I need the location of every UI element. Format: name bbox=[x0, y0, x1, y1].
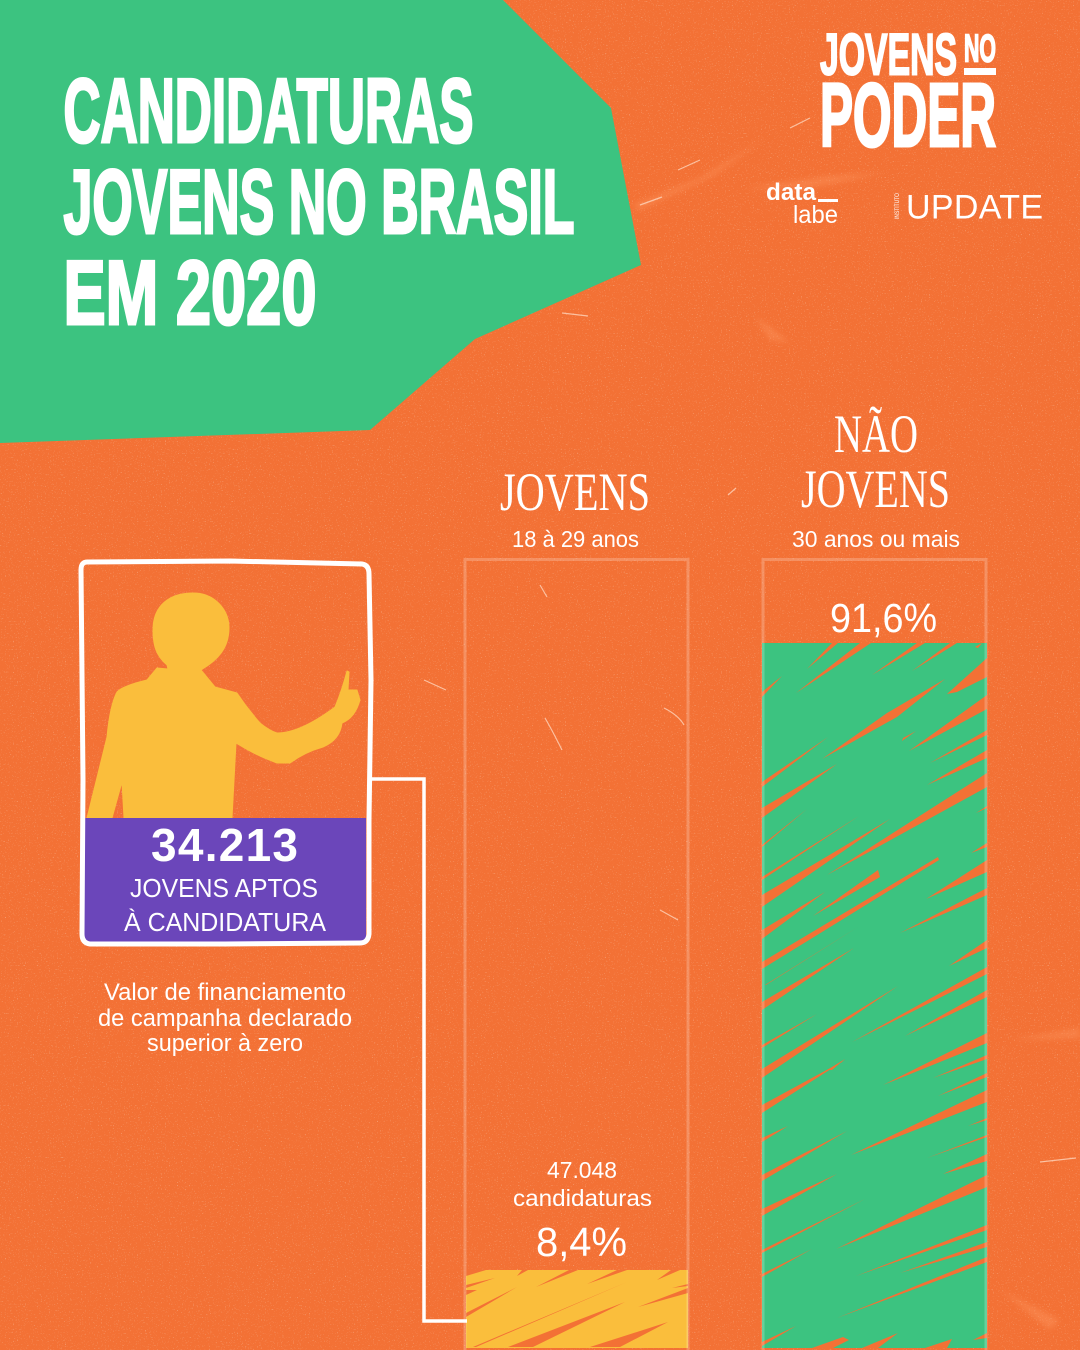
column heading: não jovens bbox=[792, 404, 960, 552]
note: campaign financing: Valor de financiamento bbox=[104, 979, 346, 1006]
caption bbox=[124, 873, 327, 937]
panel: jovens aptos card bbox=[81, 561, 371, 944]
caption: À CANDIDATURA bbox=[124, 907, 327, 937]
title: CANDIDATURAS bbox=[64, 61, 474, 162]
hand-drawn frame bbox=[81, 561, 371, 944]
connector line bbox=[371, 779, 467, 1321]
logo: data labe bbox=[766, 179, 838, 229]
logo: Jovens no Poder: JOVENS bbox=[820, 22, 957, 88]
note: campaign financing: superior à zero bbox=[147, 1030, 303, 1057]
column heading: jovens: 18 à 29 anos bbox=[512, 526, 639, 552]
column heading: jovens bbox=[500, 462, 650, 552]
note: campaign financing bbox=[98, 979, 352, 1057]
bar: jovens 8,4% bbox=[465, 560, 688, 1350]
title: EM 2020 bbox=[64, 243, 316, 344]
bar: jovens 8,4%: candidaturas bbox=[513, 1185, 652, 1211]
logo: Instituto Update: UPDATE bbox=[906, 188, 1043, 226]
number: 34.213 bbox=[151, 819, 298, 871]
bar: jovens 8,4%: 8,4% bbox=[536, 1219, 627, 1265]
title: JOVENS NO BRASIL bbox=[64, 152, 574, 253]
column heading: jovens: JOVENS bbox=[500, 462, 650, 522]
note: campaign financing: de campanha declarado bbox=[98, 1005, 352, 1032]
logo: Instituto Update: INSTITUTO bbox=[894, 193, 901, 219]
column heading: não jovens: JOVENS bbox=[801, 459, 950, 519]
logo: Jovens no Poder: NO bbox=[964, 28, 996, 70]
bar: não jovens 91,6%: 91,6% bbox=[830, 595, 937, 641]
logo: Jovens no Poder bbox=[820, 22, 996, 166]
bar: jovens 8,4%: 47.048 bbox=[547, 1157, 617, 1183]
icon: person silhouette bbox=[87, 593, 360, 818]
column heading: não jovens: 30 anos ou mais bbox=[792, 526, 960, 552]
logo: data labe: data bbox=[766, 179, 817, 206]
caption: JOVENS APTOS bbox=[130, 873, 318, 903]
panel: title background bbox=[0, 0, 641, 443]
purple label box bbox=[84, 818, 366, 942]
logo: data labe: labe bbox=[793, 201, 838, 229]
title bbox=[64, 61, 574, 344]
bar: não jovens 91,6% bbox=[762, 560, 987, 1350]
column heading: não jovens: NÃO bbox=[834, 404, 918, 464]
